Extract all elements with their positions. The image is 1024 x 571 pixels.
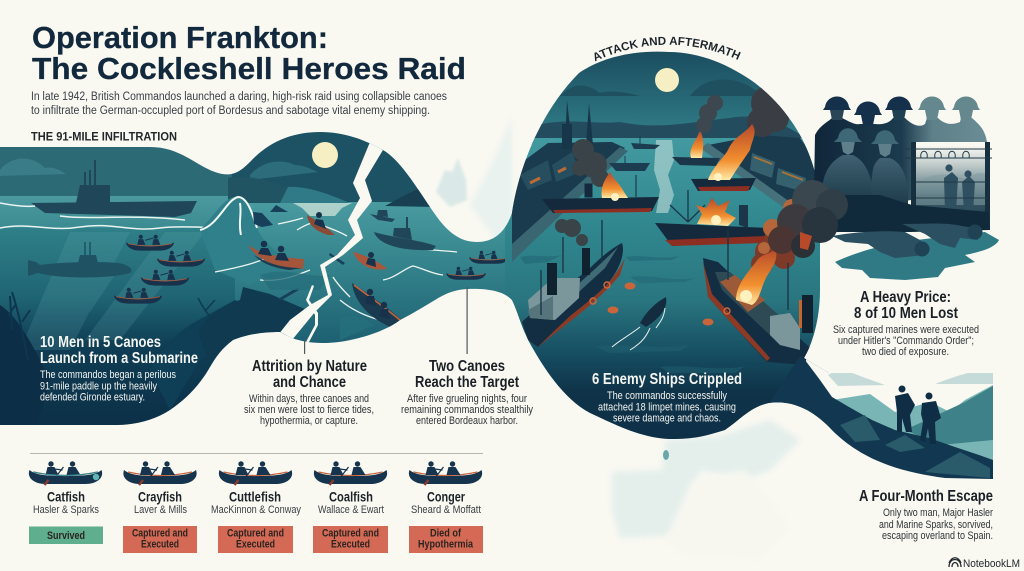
roster: Cuttlefish: Cuttlefish	[229, 488, 281, 504]
roster: Coalfish	[313, 461, 388, 553]
callout: a four-month escape	[859, 488, 993, 542]
roster: Catfish: Catfish	[47, 488, 85, 504]
roster: Cuttlefish: Executed	[236, 538, 275, 550]
callout: launch from a submarine: 91-mile paddle up the heavily	[40, 380, 157, 392]
distant ships	[609, 136, 660, 171]
moon over harbor	[655, 68, 679, 92]
callout: attrition: Within days, three canoes and	[249, 393, 369, 405]
callout: attrition	[244, 358, 374, 427]
pool with fallen marines	[832, 224, 999, 280]
mountain escape scene	[769, 356, 996, 483]
far shoreline hills	[228, 177, 437, 207]
roster: Crayfish: Crayfish	[138, 488, 182, 504]
intro text: to infiltrate the German-occupled port of Bordesus and sabotage vital enemy shipping.	[31, 105, 430, 117]
roster: Coalfish: Captured and	[322, 528, 379, 540]
title: Operation Frankton:	[32, 20, 328, 55]
left large ship with smoke plume	[522, 219, 625, 347]
callout: attrition: Attrition by Nature	[252, 358, 367, 375]
storm water	[235, 202, 525, 347]
callout: two canoes reach the target	[401, 358, 533, 427]
callout: a heavy price: 8 of 10 Men Lost	[854, 305, 959, 322]
canoes nearing the target	[446, 251, 509, 280]
callout: a heavy price: A Heavy Price:	[860, 289, 951, 306]
NotebookLM logo and wordmark: NotebookLM	[963, 558, 1020, 570]
fading back row of soldiers	[814, 96, 987, 210]
underwater gradient	[0, 228, 240, 428]
callout: a heavy price: under Hitler's "Commando Order";	[838, 335, 974, 347]
right town and quay	[703, 136, 814, 207]
callout: launch from a submarine	[40, 334, 198, 404]
callout: enemy ships crippled: severe damage and chaos.	[613, 412, 721, 424]
callout: enemy ships crippled: attached 18 limpet mines, causing	[598, 402, 736, 414]
sky clouds on open sea	[0, 158, 66, 176]
moon over the strait	[312, 142, 338, 168]
light rays under water	[20, 232, 205, 350]
roster: Catfish: Survived	[47, 530, 85, 542]
storm clouds	[250, 161, 318, 180]
rocks in the strait	[253, 205, 288, 227]
section heading: infiltration: THE 91-MILE INFILTRATION	[31, 132, 177, 144]
roster: Crayfish	[123, 461, 197, 553]
roster: Cuttlefish: Captured and	[227, 528, 284, 540]
scene: storm circle sky	[232, 128, 517, 203]
sea surface band	[0, 196, 228, 228]
callout: enemy ships crippled	[592, 371, 742, 424]
callout: two canoes reach the target: Reach the Target	[415, 374, 520, 391]
seabed left with kelp	[0, 292, 50, 388]
front captured marines	[823, 128, 908, 218]
roster: Coalfish: Wallace & Ewart	[318, 504, 384, 516]
callout: attrition: hypothermia, or capture.	[260, 415, 358, 427]
rough water crests	[215, 218, 457, 320]
scene: open sea sky	[0, 147, 250, 196]
distant hills	[532, 116, 805, 145]
roster: Cuttlefish: MacKinnon & Conway	[211, 504, 301, 516]
title	[32, 20, 466, 86]
callout: a four-month escape: and Marine Sparks, sorvived,	[879, 519, 993, 531]
callout: two canoes reach the target: remaining commandos stealthily	[401, 404, 533, 416]
roster: Conger: Conger	[427, 488, 465, 504]
callout: attrition: six men were lost to fierce tides,	[244, 404, 374, 416]
moonlight reflection	[654, 140, 674, 213]
roster: Crayfish: Executed	[141, 538, 179, 550]
callout: two canoes reach the target: After five grueling nights, four	[407, 393, 527, 405]
canoe roster divider	[30, 453, 483, 454]
callout: launch from a submarine: The commandos began a perilous	[40, 369, 176, 381]
roster: Coalfish: Coalfish	[329, 488, 373, 504]
curve guide for attack heading	[594, 45, 742, 62]
limpet mines and saboteur canoe	[608, 282, 714, 350]
roster: Crayfish: Captured and	[132, 528, 188, 540]
callout: a heavy price: two died of exposure.	[862, 346, 949, 358]
roster: Catfish	[29, 461, 103, 544]
intro text: In late 1942, British Commandos launched a daring, high-risk raid using collapsible canoes	[31, 91, 447, 103]
roster: Conger: Died of	[430, 528, 461, 540]
breaking wave	[200, 196, 278, 278]
callout: a four-month escape: escaping overland to Spain.	[882, 530, 993, 542]
roster: Conger	[409, 461, 483, 553]
callout: attrition: and Chance	[273, 374, 346, 391]
crack between the two scenes	[278, 142, 383, 342]
callout: a four-month escape: Only two man, Major Hasler	[883, 507, 993, 519]
burning ship: far right	[672, 95, 723, 166]
leader line: target	[466, 287, 468, 354]
faded map of Europe	[436, 118, 800, 560]
submarine on the surface	[31, 160, 197, 217]
intro text	[31, 91, 447, 117]
burning ship: center right with tall flame	[691, 86, 789, 191]
exploding ship at center	[655, 190, 769, 246]
scene: harbor sky	[532, 52, 805, 145]
callout: a heavy price: Six captured marines were executed	[833, 324, 979, 336]
dark water ripples	[520, 255, 745, 373]
small canoes on open sea	[114, 235, 205, 304]
large burning ship bottom right	[703, 224, 815, 365]
roster: Crayfish: Laver & Mills	[134, 504, 187, 516]
callout: enemy ships crippled: The commandos successfully	[607, 390, 727, 402]
dark ground beneath the soldiers	[815, 195, 990, 232]
roster: Coalfish: Executed	[331, 538, 370, 550]
barbed wire fence	[905, 142, 992, 230]
submerged submarine	[28, 242, 132, 278]
section heading: attack and aftermath: ATTACK AND AFTERMATH	[594, 36, 741, 62]
smoke drifting from burning ship	[758, 180, 848, 258]
roster: Conger: Hypothermia	[418, 538, 474, 550]
callout: two canoes reach the target: Two Canoes	[429, 358, 505, 375]
fence backdrop and distant guards	[914, 145, 988, 230]
left town and quay	[512, 100, 628, 262]
surface waves	[0, 203, 232, 229]
roster: Catfish: Hasler & Sparks	[33, 504, 99, 516]
roster: Conger: Sheard & Moffatt	[411, 504, 481, 516]
callout: a four-month escape: A Four-Month Escape	[859, 488, 993, 505]
callout: enemy ships crippled: 6 Enemy Ships Crippled	[592, 371, 742, 388]
main illustration: journey from submarine to Bordeaux harbor	[0, 45, 996, 483]
two escaping commandos	[895, 386, 941, 444]
soldiers and captivity scene	[758, 96, 999, 280]
moonlight on water	[293, 203, 352, 216]
title: The Cockleshell Heroes Raid	[32, 51, 466, 86]
harbor water	[505, 138, 835, 443]
callout: launch from a submarine: Launch from a Submarine	[40, 350, 198, 367]
callout: launch from a submarine: defended Gironde estuary.	[40, 392, 145, 404]
dark wave hollows	[260, 272, 356, 340]
burning ship: left with smoke	[542, 139, 659, 213]
callout: two canoes reach the target: entered Bordeaux harbor.	[416, 415, 518, 427]
callout: launch from a submarine: 10 Men in 5 Canoes	[40, 334, 161, 351]
rocks near storm	[150, 287, 315, 410]
roster: Cuttlefish	[211, 461, 301, 553]
callout: a heavy price	[833, 289, 979, 358]
harbor clouds	[560, 79, 770, 96]
enemy patrol boats	[370, 210, 436, 250]
storm canoes and struggling crews	[248, 212, 403, 330]
leader line: attrition	[304, 340, 305, 354]
